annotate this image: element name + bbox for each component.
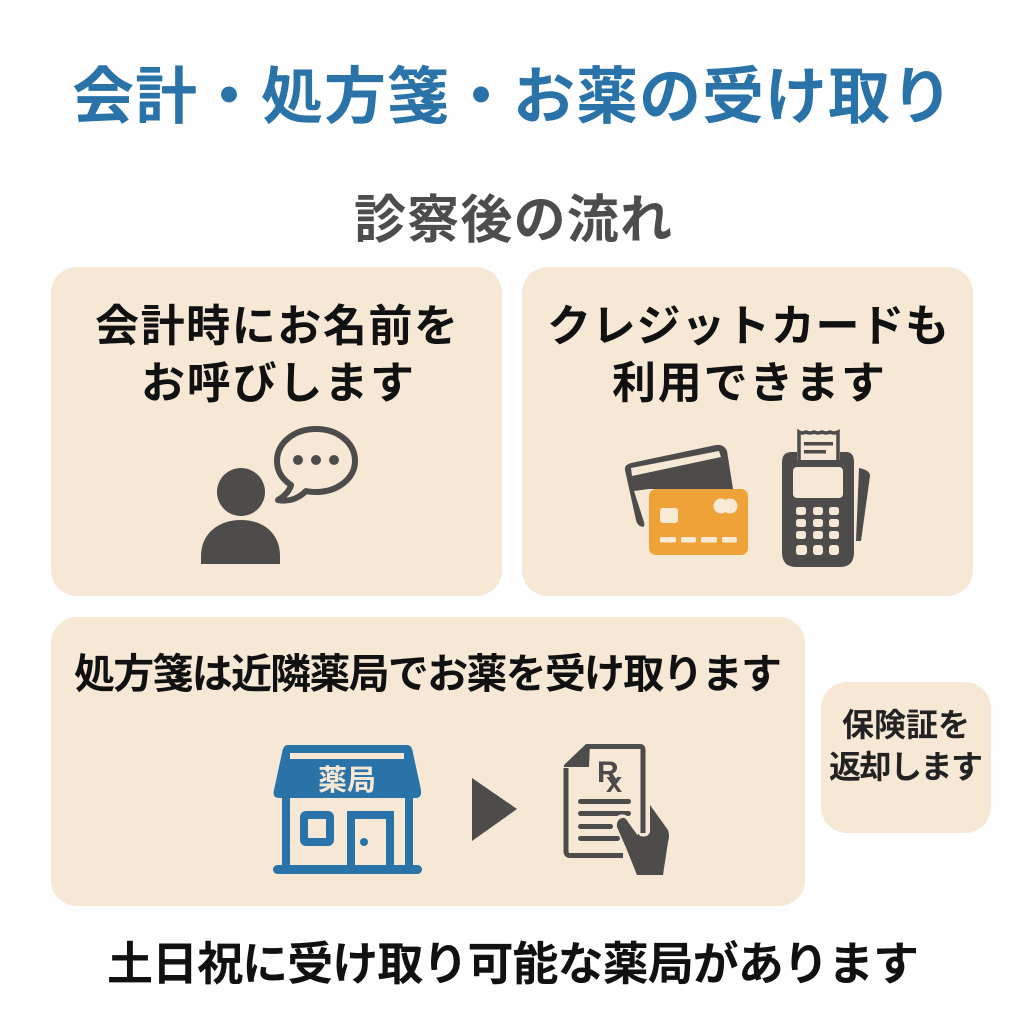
icon: prescription in hand (564, 744, 669, 875)
panel heading: credit card: 利用できます (612, 359, 885, 408)
icon: card terminal (782, 432, 870, 567)
panel: credit card (522, 267, 973, 596)
arrow: pharmacy to prescription (472, 778, 517, 841)
panel heading: pharmacy: 処方箋は近隣薬局でお薬を受け取ります (74, 651, 782, 697)
icon: prescription in hand: x (606, 767, 622, 799)
title: 会計・処方箋・お薬の受け取り (72, 63, 953, 132)
panel heading: credit card: クレジットカードも (547, 302, 949, 351)
panel text: return insurance card: 保険証を (842, 707, 970, 743)
panel: pharmacy (51, 617, 805, 906)
panel: return insurance card (821, 682, 991, 833)
panel heading: call name: 会計時にお名前を (95, 302, 458, 351)
icon: person speaking (201, 429, 355, 564)
subtitle: 診察後の流れ (354, 192, 672, 250)
footer note: 土日祝に受け取り可能な薬局があります (107, 938, 919, 990)
icon: prescription in hand: R (597, 756, 619, 789)
icon: pharmacy building: 薬局 (318, 764, 376, 797)
panel heading: call name: お呼びします (141, 359, 414, 408)
icon: pharmacy building (273, 745, 422, 874)
panel: call name at checkout (51, 267, 502, 596)
panel text: return insurance card: 返却します (829, 749, 983, 785)
icon: credit cards (625, 445, 748, 555)
